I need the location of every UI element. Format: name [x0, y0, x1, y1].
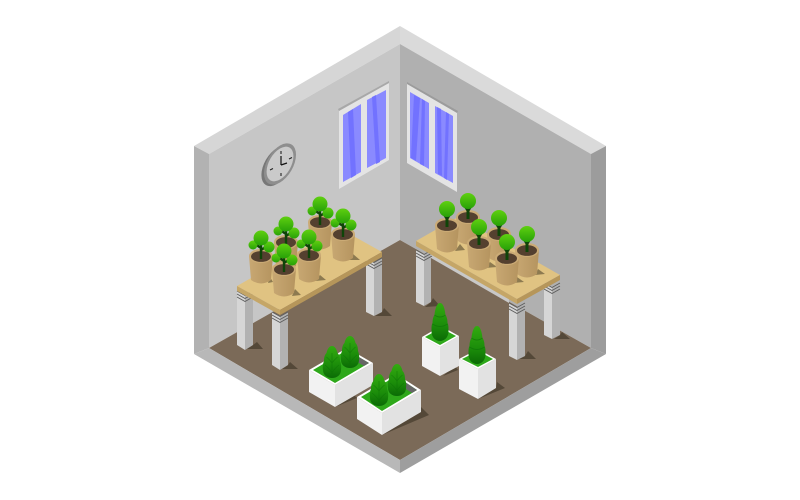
plant 5	[515, 226, 539, 278]
right table	[416, 217, 570, 360]
back left leg	[237, 290, 253, 350]
large planter front	[357, 364, 429, 435]
small planter back	[422, 303, 459, 376]
under-table rail	[431, 252, 509, 303]
room shell	[194, 26, 606, 473]
left table plants	[248, 196, 356, 296]
plant 4	[467, 219, 491, 270]
right window	[407, 82, 458, 192]
base left edge	[194, 348, 400, 473]
front leg	[509, 303, 525, 360]
table top	[237, 228, 382, 310]
plant 2	[274, 216, 300, 270]
left table	[237, 228, 392, 370]
plant 3	[487, 210, 511, 262]
leg shadows	[247, 342, 263, 349]
back right leg	[366, 258, 382, 316]
plant 4	[248, 230, 274, 284]
floor	[209, 240, 591, 460]
base right edge	[400, 348, 606, 473]
pot shadows	[455, 244, 545, 283]
right leg	[544, 283, 560, 339]
left leg	[416, 250, 432, 306]
plant 6	[272, 244, 298, 296]
plant 2	[435, 201, 459, 252]
right wall	[400, 44, 591, 348]
plant 1	[456, 193, 480, 244]
plant 3	[330, 208, 356, 262]
large planter back	[309, 336, 373, 407]
table top	[416, 217, 560, 299]
left window	[338, 81, 389, 189]
right table plants	[435, 193, 539, 286]
small planter front	[459, 326, 505, 399]
plant 1	[308, 196, 334, 250]
top edge of left wall	[194, 26, 400, 154]
plant 6	[495, 234, 519, 286]
front leg	[272, 312, 288, 370]
pot shadows	[268, 254, 360, 296]
top edge of right wall	[400, 26, 606, 154]
plant 5	[296, 230, 322, 282]
left wall outer band	[194, 146, 209, 354]
right wall outer band	[591, 146, 606, 354]
wall clock	[261, 136, 296, 193]
left wall	[209, 44, 400, 348]
leg shadows	[425, 298, 440, 307]
